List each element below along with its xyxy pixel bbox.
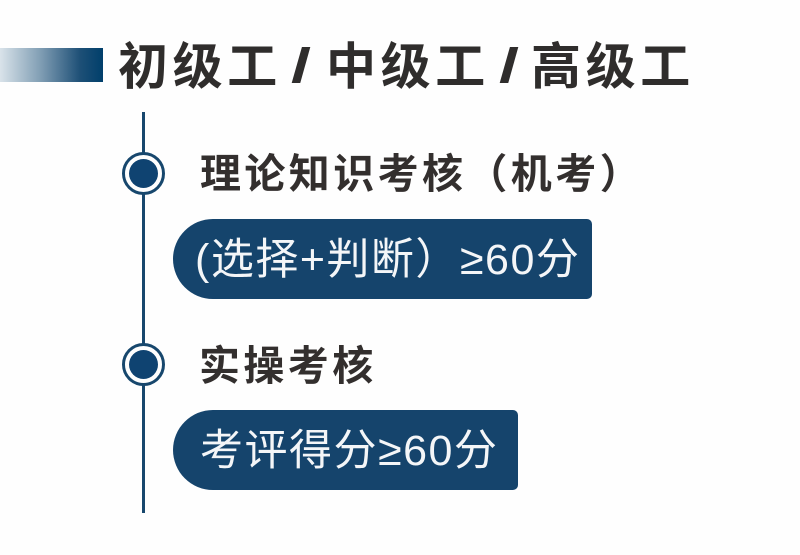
header gradient bar [0,48,103,82]
pill: practical score [173,410,518,490]
title [118,39,695,95]
title: / [291,40,311,93]
timeline node 1 [122,152,165,195]
timeline node 2 [122,343,165,386]
timeline line [142,112,145,513]
title: 初级工 [118,39,282,95]
heading: practical exam: 实操考核 [199,343,377,389]
title: 高级工 [531,39,695,95]
pill text 2: 考评得分≥60分 [200,427,498,475]
node 2 inner dot [129,350,158,379]
title: 中级工 [326,39,490,95]
heading: theory exam: 理论知识考核（机考） [200,151,644,197]
title: / [499,40,519,93]
pill text 1: (选择+判断）≥60分 [195,236,580,284]
node 1 inner dot [129,159,158,188]
pill: theory score [173,219,592,299]
